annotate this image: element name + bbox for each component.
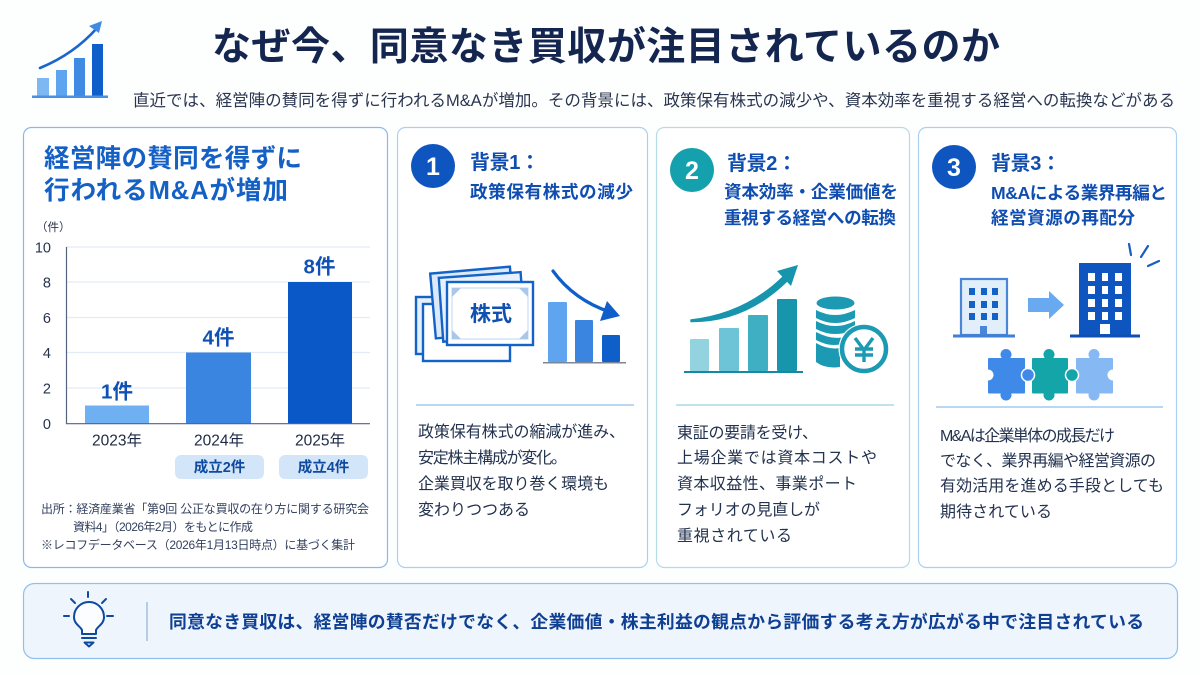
body text 2	[677, 424, 877, 545]
body text 1: 変わりつつある	[418, 501, 530, 519]
number badge 3	[932, 145, 976, 189]
heading 3: M&Aによる業界再編と	[991, 183, 1167, 203]
body text 1: 政策保有株式の縮減が進み、	[418, 423, 625, 441]
body text 3: M&Aは企業単体の成長だけ	[940, 427, 1115, 445]
bar chart: 4件	[203, 326, 234, 350]
body text 3: でなく、業界再編や経営資源の	[940, 452, 1156, 470]
bar chart: 6	[43, 311, 51, 327]
body text 3: 有効活用を進める手段としても	[940, 477, 1164, 495]
icon: stock certificates and falling bars	[416, 267, 626, 363]
bar chart: 0	[43, 417, 51, 433]
subtitle: 直近では、経営陣の賛同を得ずに行われるM&Aが増加。その背景には、政策保有株式の減少や、資本効率を重視する経営への転換などがある	[133, 91, 1175, 110]
icon: growth chart and yen coins	[684, 265, 890, 374]
body text 3: 期待されている	[940, 503, 1052, 521]
source note: ※レコフデータベース（2026年1月13日時点）に基づく集計	[41, 537, 355, 552]
bar chart: 4	[43, 346, 51, 362]
number badge 3: 3	[947, 154, 961, 182]
heading 3: 背景3：	[991, 152, 1061, 175]
icon: rising bar chart	[32, 21, 108, 98]
body text 2: 上場企業では資本コストや	[677, 449, 877, 467]
source note	[41, 501, 369, 552]
bar chart: 10	[35, 240, 51, 256]
bar chart: 1件	[101, 380, 133, 404]
bar chart: 8	[43, 276, 51, 292]
heading 2: 背景2：	[727, 152, 797, 175]
body text 2: 重視されている	[677, 527, 792, 545]
panel: conclusion banner	[24, 584, 1178, 658]
number badge 1: 1	[426, 153, 440, 181]
banner text: 同意なき買収は、経営陣の賛否だけでなく、企業価値・株主利益の観点から評価する考え方が広がる中で注目されている	[169, 611, 1144, 632]
bar chart: 2025年	[295, 432, 345, 450]
number badge 2	[670, 148, 714, 192]
bar chart: （件）	[36, 220, 70, 234]
title: なぜ今、同意なき買収が注目されているのか	[212, 26, 1000, 69]
heading 2: 重視する経営への転換	[724, 208, 896, 228]
body text 3	[940, 427, 1164, 521]
panel heading	[44, 144, 302, 205]
body text 2: フォリオの見直しが	[677, 501, 820, 519]
number badge 2: 2	[685, 157, 699, 185]
bar chart: 2	[43, 382, 51, 398]
number badge 1	[411, 144, 455, 188]
panel: M&A chart	[24, 128, 388, 568]
body text 1: 企業買収を取り巻く環境も	[418, 475, 609, 493]
panel: background 1	[398, 128, 648, 568]
heading 3: 経営資源の再配分	[991, 208, 1135, 228]
bar chart: 成立2件	[194, 458, 245, 476]
heading 1: 政策保有株式の減少	[470, 182, 633, 202]
heading 1	[470, 151, 633, 202]
panel heading: 行われるM&Aが増加	[44, 175, 288, 205]
panel: background 2	[656, 128, 910, 568]
source note: 資料4」（2026年2月）をもとに作成	[73, 520, 253, 534]
source note: 出所：経済産業省「第9回 公正な買収の在り方に関する研究会	[41, 501, 369, 516]
bar chart: 2024年	[194, 432, 244, 450]
icon: stock certificates and falling bars: 株式	[470, 303, 512, 326]
body text 2: 資本収益性、事業ポート	[677, 475, 857, 493]
bar chart: 2023年	[92, 432, 142, 450]
body text 1	[418, 423, 625, 519]
bar chart: 成立4件	[298, 458, 349, 476]
heading 2	[724, 152, 898, 228]
body text 2: 東証の要請を受け、	[677, 424, 818, 442]
bar chart	[35, 220, 370, 479]
icon: light bulb	[64, 592, 113, 646]
panel heading: 経営陣の賛同を得ずに	[44, 144, 302, 173]
heading 2: 資本効率・企業価値を	[724, 182, 898, 202]
panel: background 3	[918, 128, 1176, 568]
bar chart: 8件	[304, 256, 335, 278]
icon: buildings and puzzle pieces	[953, 244, 1159, 400]
heading 3	[991, 152, 1167, 228]
heading 1: 背景1：	[470, 151, 540, 174]
body text 1: 安定株主構成が変化。	[418, 449, 567, 467]
